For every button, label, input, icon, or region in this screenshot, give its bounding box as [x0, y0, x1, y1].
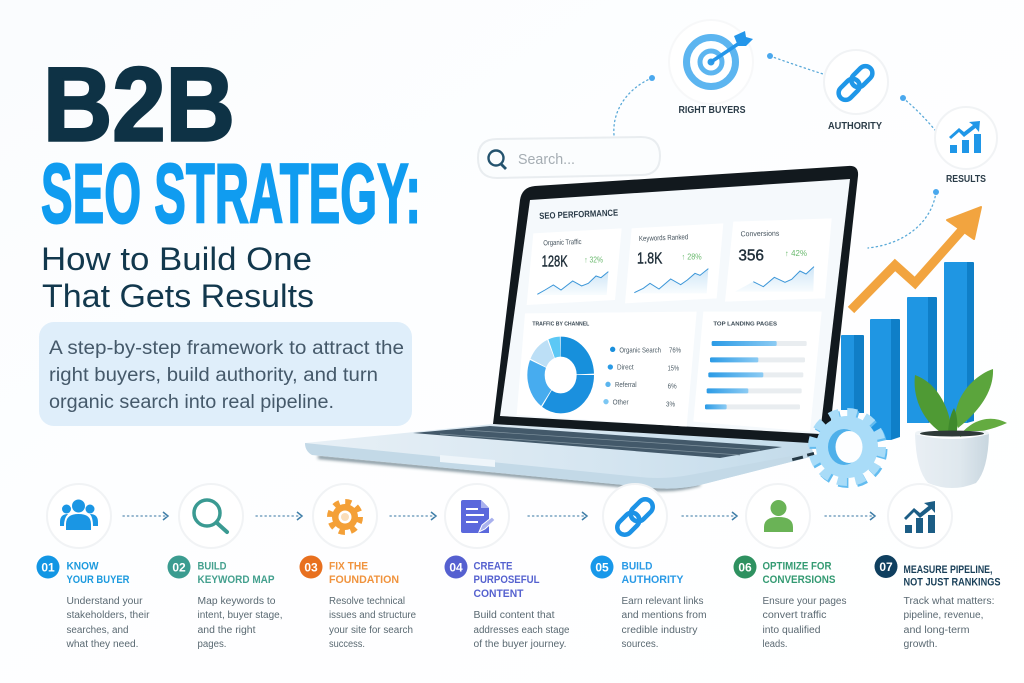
- callout: framework description: organic search into real pipeline.: [49, 392, 334, 413]
- description: [329, 596, 416, 650]
- description: growth.: [904, 639, 938, 650]
- heading: FIX THE: [329, 560, 368, 572]
- step 6: optimize for conversions: [734, 484, 846, 650]
- heading: AUTHORITY: [622, 574, 684, 586]
- legend: Referral: [615, 382, 637, 389]
- description: [65, 596, 150, 650]
- icon: person: [764, 500, 793, 532]
- heading: KEYWORD MAP: [198, 574, 274, 586]
- heading: [622, 560, 684, 586]
- step 4: create purposeful content: [444, 484, 570, 650]
- heading: [66, 560, 130, 586]
- KPI card: keywords ranked: [625, 223, 723, 303]
- badge 07: [874, 555, 898, 578]
- description: convert traffic: [762, 610, 826, 621]
- icon: target, right buyers: [669, 20, 753, 116]
- icon: magnifier: [488, 150, 506, 169]
- description: into qualified: [762, 625, 820, 636]
- step 3: fix the foundation: 03: [304, 560, 318, 574]
- keyboard: [413, 426, 782, 458]
- label: results: RESULTS: [946, 174, 986, 185]
- heading: OPTIMIZE FOR: [762, 560, 832, 572]
- label: authority: AUTHORITY: [828, 121, 882, 132]
- description: sources.: [622, 639, 658, 650]
- legend: [603, 347, 681, 409]
- panel: top landing pages: TOP LANDING PAGES: [713, 321, 777, 327]
- badge 03: [300, 556, 322, 578]
- badge 01: [36, 556, 60, 578]
- step 1: know your buyer: [36, 484, 150, 650]
- heading: [762, 560, 836, 586]
- legend: Organic Search: [619, 348, 661, 355]
- heading: BUILD: [622, 560, 653, 572]
- icon: magnifier: [194, 500, 227, 532]
- heading: PURPOSEFUL: [474, 574, 540, 586]
- growth arrow: [851, 207, 981, 310]
- description: Build content that: [474, 610, 555, 621]
- description: addresses each stage: [474, 625, 570, 636]
- icon: link, authority: [824, 50, 888, 132]
- KPI card: organic traffic: 128K: [542, 254, 568, 271]
- description: pipeline, revenue,: [904, 610, 984, 621]
- KPI card: keywords ranked: 1.8K: [637, 251, 663, 268]
- laptop base: [305, 424, 814, 489]
- description: and mentions from: [622, 610, 706, 621]
- KPI card: conversions: 356: [738, 248, 764, 265]
- badge 05: [590, 556, 614, 578]
- icon: document with pen: [461, 500, 495, 533]
- panel: top landing pages: [693, 312, 822, 432]
- KPI card: conversions: ↑ 42%: [785, 249, 807, 258]
- KPI card: organic traffic: ↑ 32%: [584, 256, 603, 265]
- description: Earn relevant links: [622, 596, 704, 607]
- donut chart: [536, 347, 585, 403]
- label: right buyers: RIGHT BUYERS: [678, 105, 746, 116]
- subtitle: [41, 241, 314, 314]
- step 2: build keyword map: 02: [172, 560, 186, 574]
- heading: [474, 560, 540, 600]
- process arrows: [123, 512, 875, 520]
- description: leads.: [762, 639, 788, 650]
- step 5: build authority: [590, 484, 706, 650]
- plant leaves: [915, 369, 1007, 437]
- subtitle: That Gets Results: [42, 278, 314, 314]
- icon: growth chart: [904, 501, 935, 533]
- KPI card: keywords ranked: Keywords Ranked: [639, 232, 688, 243]
- heading: [329, 560, 399, 586]
- step 7: measure pipeline: 07: [879, 560, 893, 574]
- heading: FOUNDATION: [329, 574, 399, 586]
- gear: [813, 413, 882, 483]
- title block: [41, 46, 421, 314]
- description: Resolve technical: [329, 596, 405, 607]
- legend: 3%: [666, 402, 675, 409]
- description: issues and structure: [329, 610, 416, 621]
- description: stakeholders, their: [66, 610, 150, 621]
- icon: chart, results: [935, 107, 997, 185]
- heading: BUILD: [198, 560, 227, 572]
- callout: framework description: A step-by-step framework to attract the: [49, 338, 404, 359]
- heading: KNOW: [66, 560, 99, 572]
- KPI card: conversions: Conversions: [741, 229, 780, 238]
- description: Understand your: [66, 596, 143, 607]
- description: success.: [329, 639, 365, 650]
- dashboard: [517, 208, 832, 432]
- step 2: build keyword map: [168, 484, 282, 650]
- icon: link: [614, 496, 656, 538]
- description: credible industry: [622, 625, 698, 636]
- 3D bar chart: [841, 262, 974, 440]
- description: Map keywords to: [198, 596, 276, 607]
- subtitle: How to Build One: [41, 241, 312, 277]
- KPI card: organic traffic: Organic Traffic: [543, 237, 582, 247]
- description: [474, 610, 570, 650]
- panel: traffic by channel: [517, 312, 697, 427]
- step 1: know your buyer: 01: [41, 560, 55, 574]
- description: Ensure your pages: [762, 596, 846, 607]
- heading: [198, 560, 274, 586]
- laptop: [305, 166, 858, 489]
- pot: [915, 434, 989, 488]
- panel: traffic by channel: TRAFFIC BY CHANNEL: [532, 321, 590, 327]
- step 6: optimize for conversions: 06: [738, 560, 752, 574]
- dotted connectors and nodes: [614, 53, 939, 248]
- laptop lid: [493, 166, 858, 443]
- title: SEO Strategy: SEO STRATEGY:: [41, 146, 421, 240]
- description: pages.: [198, 639, 226, 650]
- KPI card: conversions: [725, 218, 832, 302]
- description: your site for search: [329, 625, 413, 636]
- heading: CREATE: [474, 560, 512, 572]
- description: what they need.: [65, 639, 138, 650]
- callout: framework description: [39, 322, 412, 426]
- description: searches, and: [66, 625, 128, 636]
- laptop screen: [500, 179, 850, 434]
- badge 04: [444, 556, 468, 578]
- legend: Other: [613, 399, 629, 406]
- description: intent, buyer stage,: [198, 610, 282, 621]
- heading: MEASURE PIPELINE,: [904, 564, 992, 576]
- potted plant: [915, 369, 1007, 488]
- callout: framework description: right buyers, build authority, and turn: [49, 365, 378, 386]
- heading: CONTENT: [474, 588, 524, 600]
- KPI card: keywords ranked: ↑ 28%: [682, 252, 702, 261]
- description: [904, 596, 994, 650]
- legend: 6%: [668, 384, 677, 391]
- legend: 15%: [668, 366, 679, 373]
- icon: people: [60, 500, 98, 530]
- legend: 76%: [669, 348, 681, 355]
- badge 02: [168, 556, 190, 578]
- search placeholder: Search...: [518, 152, 575, 168]
- heading: YOUR BUYER: [66, 574, 130, 586]
- legend: Direct: [617, 364, 634, 371]
- search bar: [478, 137, 660, 178]
- icon: gear: [330, 502, 360, 532]
- description: of the buyer journey.: [474, 639, 566, 650]
- dashboard title: SEO PERFORMANCE: [539, 208, 618, 221]
- step 5: build authority: 05: [595, 560, 609, 574]
- description: and the right: [198, 625, 256, 636]
- heading: [904, 564, 1000, 588]
- description: [198, 596, 282, 650]
- badge 06: [734, 556, 756, 578]
- heading: CONVERSIONS: [762, 574, 836, 586]
- description: and long-term: [904, 625, 970, 636]
- heading: NOT JUST RANKINGS: [904, 576, 1000, 588]
- KPI card: organic traffic: [527, 228, 622, 305]
- description: [762, 596, 846, 650]
- title: B2B: B2B: [43, 46, 235, 164]
- description: Track what matters:: [904, 596, 994, 607]
- description: [622, 596, 706, 650]
- step 4: create purposeful content: 04: [449, 560, 463, 574]
- step 3: fix the foundation: [300, 484, 416, 650]
- step 7: measure pipeline: [874, 484, 1000, 650]
